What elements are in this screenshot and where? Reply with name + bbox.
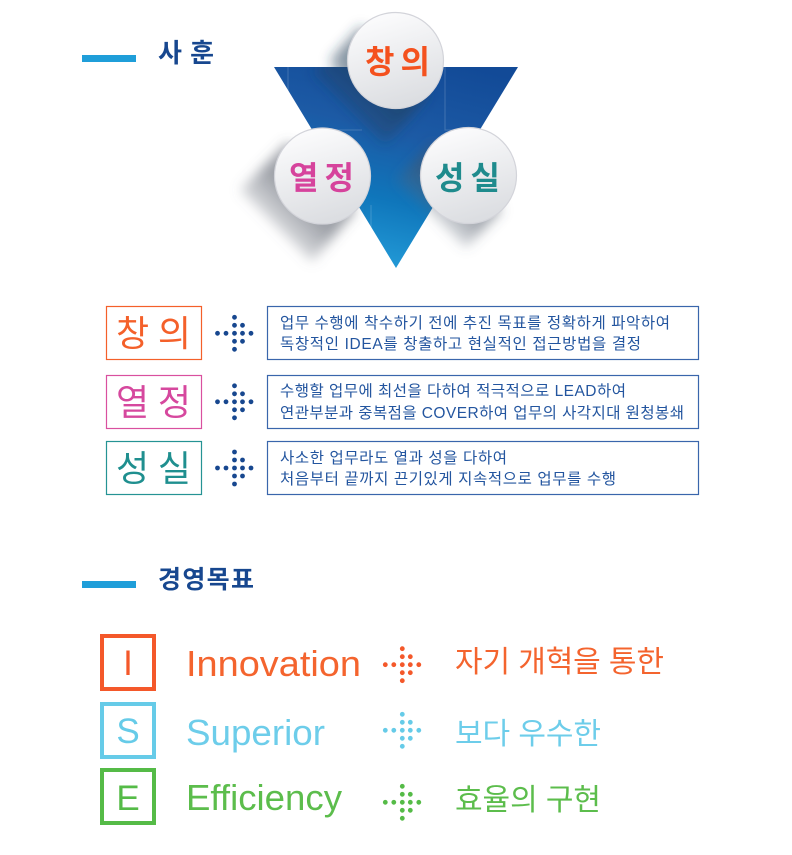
heading: 사훈: 사 훈	[158, 38, 214, 68]
letter box: S	[102, 704, 154, 757]
label box: 창의	[106, 306, 202, 360]
icon: dotted arrow	[215, 383, 253, 420]
letter box: E: E	[116, 779, 140, 818]
circle: 창의	[348, 12, 444, 108]
row: 창의	[106, 306, 698, 360]
description box	[268, 306, 698, 360]
icon: dotted arrow	[383, 784, 421, 821]
heading: 경영목표	[82, 566, 254, 594]
row: 열정	[106, 376, 698, 428]
letter box: E	[102, 770, 154, 823]
goal: Superior: Superior	[186, 712, 325, 753]
description box: 업무 수행에 착수하기 전에 추진 목표를 정확하게 파악하여	[280, 314, 670, 332]
description box: 독창적인 IDEA를 창출하고 현실적인 접근방법을 결정	[280, 335, 641, 353]
label box: 창의: 창 의	[116, 313, 191, 354]
icon: dotted arrow	[383, 646, 421, 683]
description box: 연관부분과 중복점을 COVER하여 업무의 사각지대 원청봉쇄	[280, 404, 684, 422]
shadow: right circle	[396, 142, 502, 248]
label box: 열정: 열 정	[116, 382, 191, 423]
goal: Innovation	[102, 636, 664, 689]
description box	[268, 376, 698, 428]
icon: dotted arrow	[215, 450, 253, 486]
circle: 성실	[420, 128, 516, 224]
description box: 처음부터 끝까지 끈기있게 지속적으로 업무를 수행	[280, 470, 616, 488]
label box: 열정	[106, 376, 202, 428]
icon: dotted arrow	[383, 712, 421, 749]
inverted triangle	[274, 67, 518, 268]
goal: Superior	[102, 704, 601, 757]
heading: 사훈	[82, 38, 214, 68]
row: 성실	[106, 442, 698, 494]
description box	[268, 442, 698, 494]
circle: 열정	[274, 128, 370, 224]
heading: 경영목표: 경영목표	[158, 566, 254, 594]
description box: 사소한 업무라도 열과 성을 다하여	[280, 449, 507, 467]
label box: 성실	[106, 442, 202, 494]
goal: Efficiency: Efficiency	[186, 777, 342, 818]
circle: 성실: 성 실	[435, 160, 500, 196]
letter box: I: I	[123, 644, 133, 683]
shadow: left circle	[240, 142, 356, 262]
shadow: top circle on triangle	[314, 67, 430, 144]
goal: Superior: 보다 우수한	[455, 718, 601, 751]
triangle diagram: 창의 열정 성실	[240, 12, 518, 268]
goal: Innovation: Innovation	[186, 643, 361, 684]
icon: dotted arrow	[215, 315, 253, 352]
highlight lines	[288, 67, 482, 240]
label box: 성실: 성 실	[116, 448, 191, 489]
description box: 수행할 업무에 최선을 다하여 적극적으로 LEAD하여	[280, 382, 626, 400]
letter box: I	[102, 636, 154, 689]
goal: Innovation: 자기 개혁을 통한	[455, 646, 664, 679]
goal: Efficiency	[102, 770, 601, 823]
letter box: S: S	[116, 712, 140, 751]
goal: Efficiency: 효율의 구현	[455, 784, 601, 817]
shadow: top circle outside triangle	[330, 26, 395, 92]
circle: 창의: 창 의	[365, 44, 430, 80]
circle: 열정: 열 정	[289, 160, 354, 196]
